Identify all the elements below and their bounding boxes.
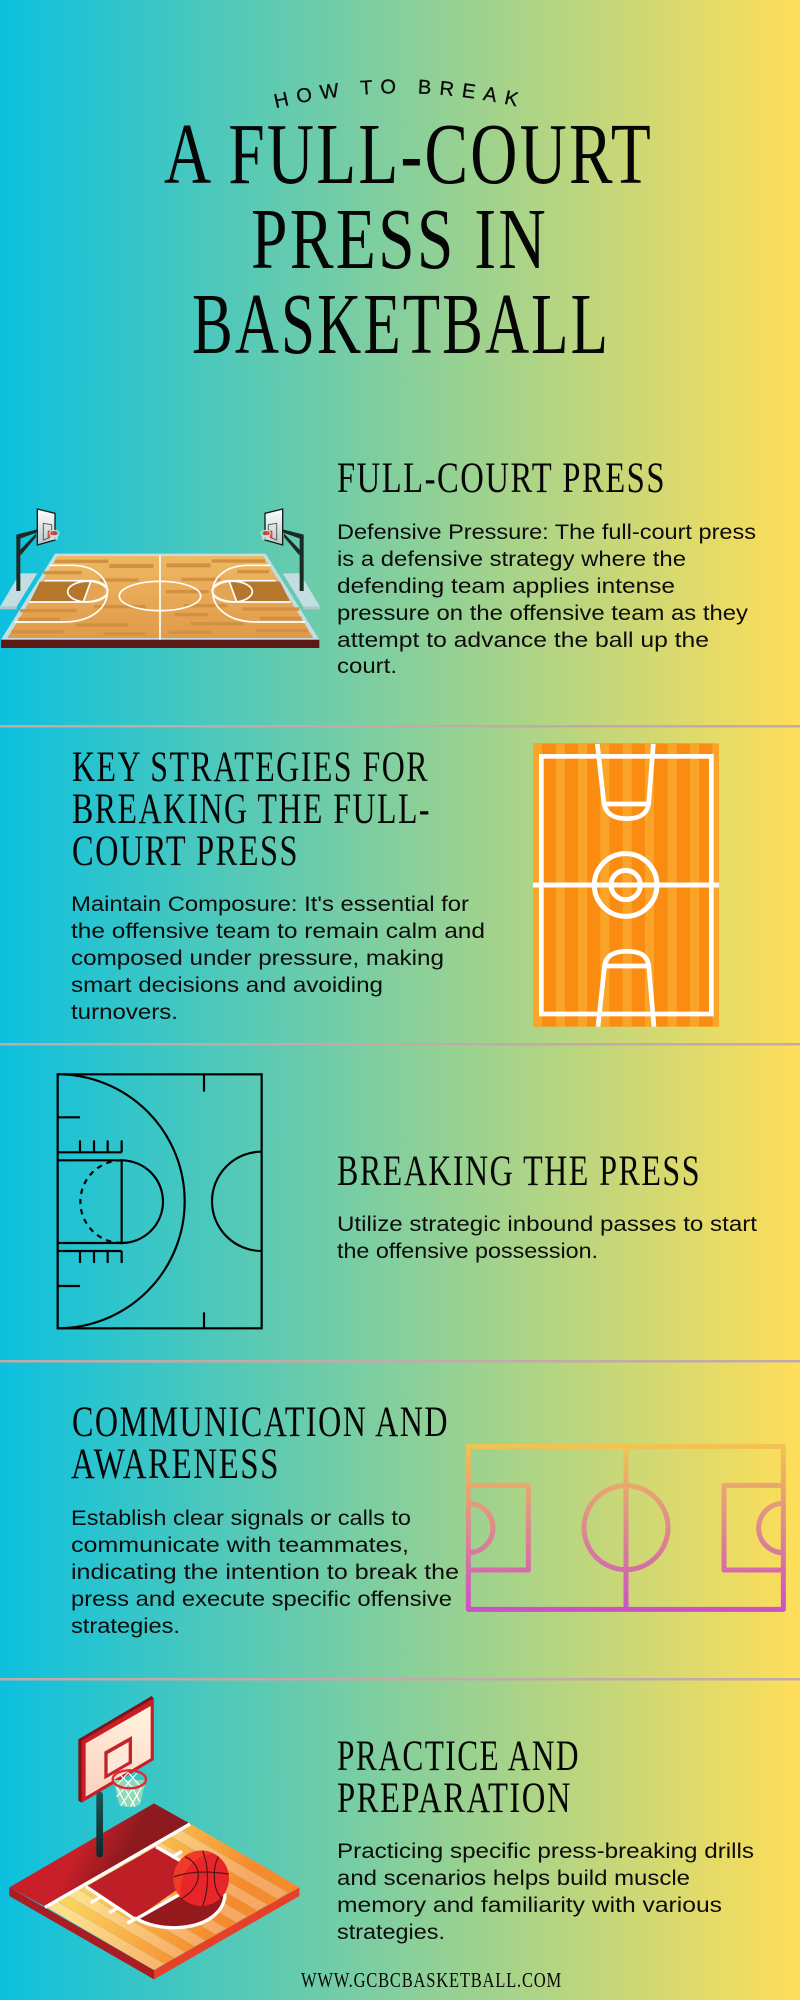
heading: BREAKING THE FULL- [72,786,431,833]
body text: defending team applies intense [337,575,675,598]
title: PRESS IN [251,190,548,287]
heading: COURT PRESS [72,828,299,875]
heading: PRACTICE AND [337,1733,580,1780]
body text: the offensive possession. [337,1240,598,1263]
illustration: perspective basketball court with hoops [0,509,320,648]
body text: communicate with teammates, [71,1534,409,1557]
illustration: black outline half court [58,1074,262,1328]
heading [337,1733,580,1822]
body text: turnovers. [71,1001,178,1024]
body text: pressure on the offensive team as they [337,602,749,625]
illustration: orange top-down court [533,743,719,1027]
title: A FULL-COURT [164,105,653,202]
body text: indicating the intention to break the [71,1561,459,1584]
heading: AWARENESS [71,1441,280,1488]
body text: the offensive team to remain calm and [71,920,485,943]
illustration: gradient outline court [468,1446,783,1609]
body text: composed under pressure, making [71,947,444,970]
heading [71,1399,449,1488]
body text [337,1840,754,1944]
kicker: how to break: HOW TO BREAK [274,79,519,108]
heading: KEY STRATEGIES FOR [72,744,429,791]
body text: is a defensive strategy where the [337,548,686,571]
body text: strategies. [71,1615,180,1638]
body text: Establish clear signals or calls to [71,1507,411,1530]
panel: full-court press [0,455,756,678]
body text: smart decisions and avoiding [71,974,383,997]
panel: practice and preparation [9,1696,754,1979]
panel: key strategies [71,743,719,1027]
footer url: WWW.GCBCBASKETBALL.COM [301,1968,562,1992]
heading: PREPARATION [337,1775,572,1822]
body text: Practicing specific press-breaking drills [337,1840,754,1863]
body text: strategies. [337,1921,445,1944]
panel: breaking the press [58,1074,757,1328]
body text: Utilize strategic inbound passes to start [337,1213,757,1236]
body text: press and execute specific offensive [71,1588,452,1611]
body text: and scenarios helps build muscle [337,1867,690,1890]
body text [71,893,485,1024]
body text: Defensive Pressure: The full-court press [337,521,756,544]
body text [71,1507,459,1638]
title: BASKETBALL [192,275,610,372]
title [164,105,653,372]
heading: COMMUNICATION AND [72,1399,449,1446]
body text [337,1213,757,1263]
body text: court. [337,655,397,678]
heading: FULL-COURT PRESS [337,455,666,502]
illustration: isometric court with hoop and ball [9,1696,299,1979]
panel: communication and awareness [71,1399,783,1638]
body text: memory and familiarity with various [337,1894,722,1917]
body text [337,521,756,678]
title block [164,79,653,372]
body text: Maintain Composure: It's essential for [71,893,469,916]
heading [72,744,431,875]
body text: attempt to advance the ball up the [337,629,709,652]
